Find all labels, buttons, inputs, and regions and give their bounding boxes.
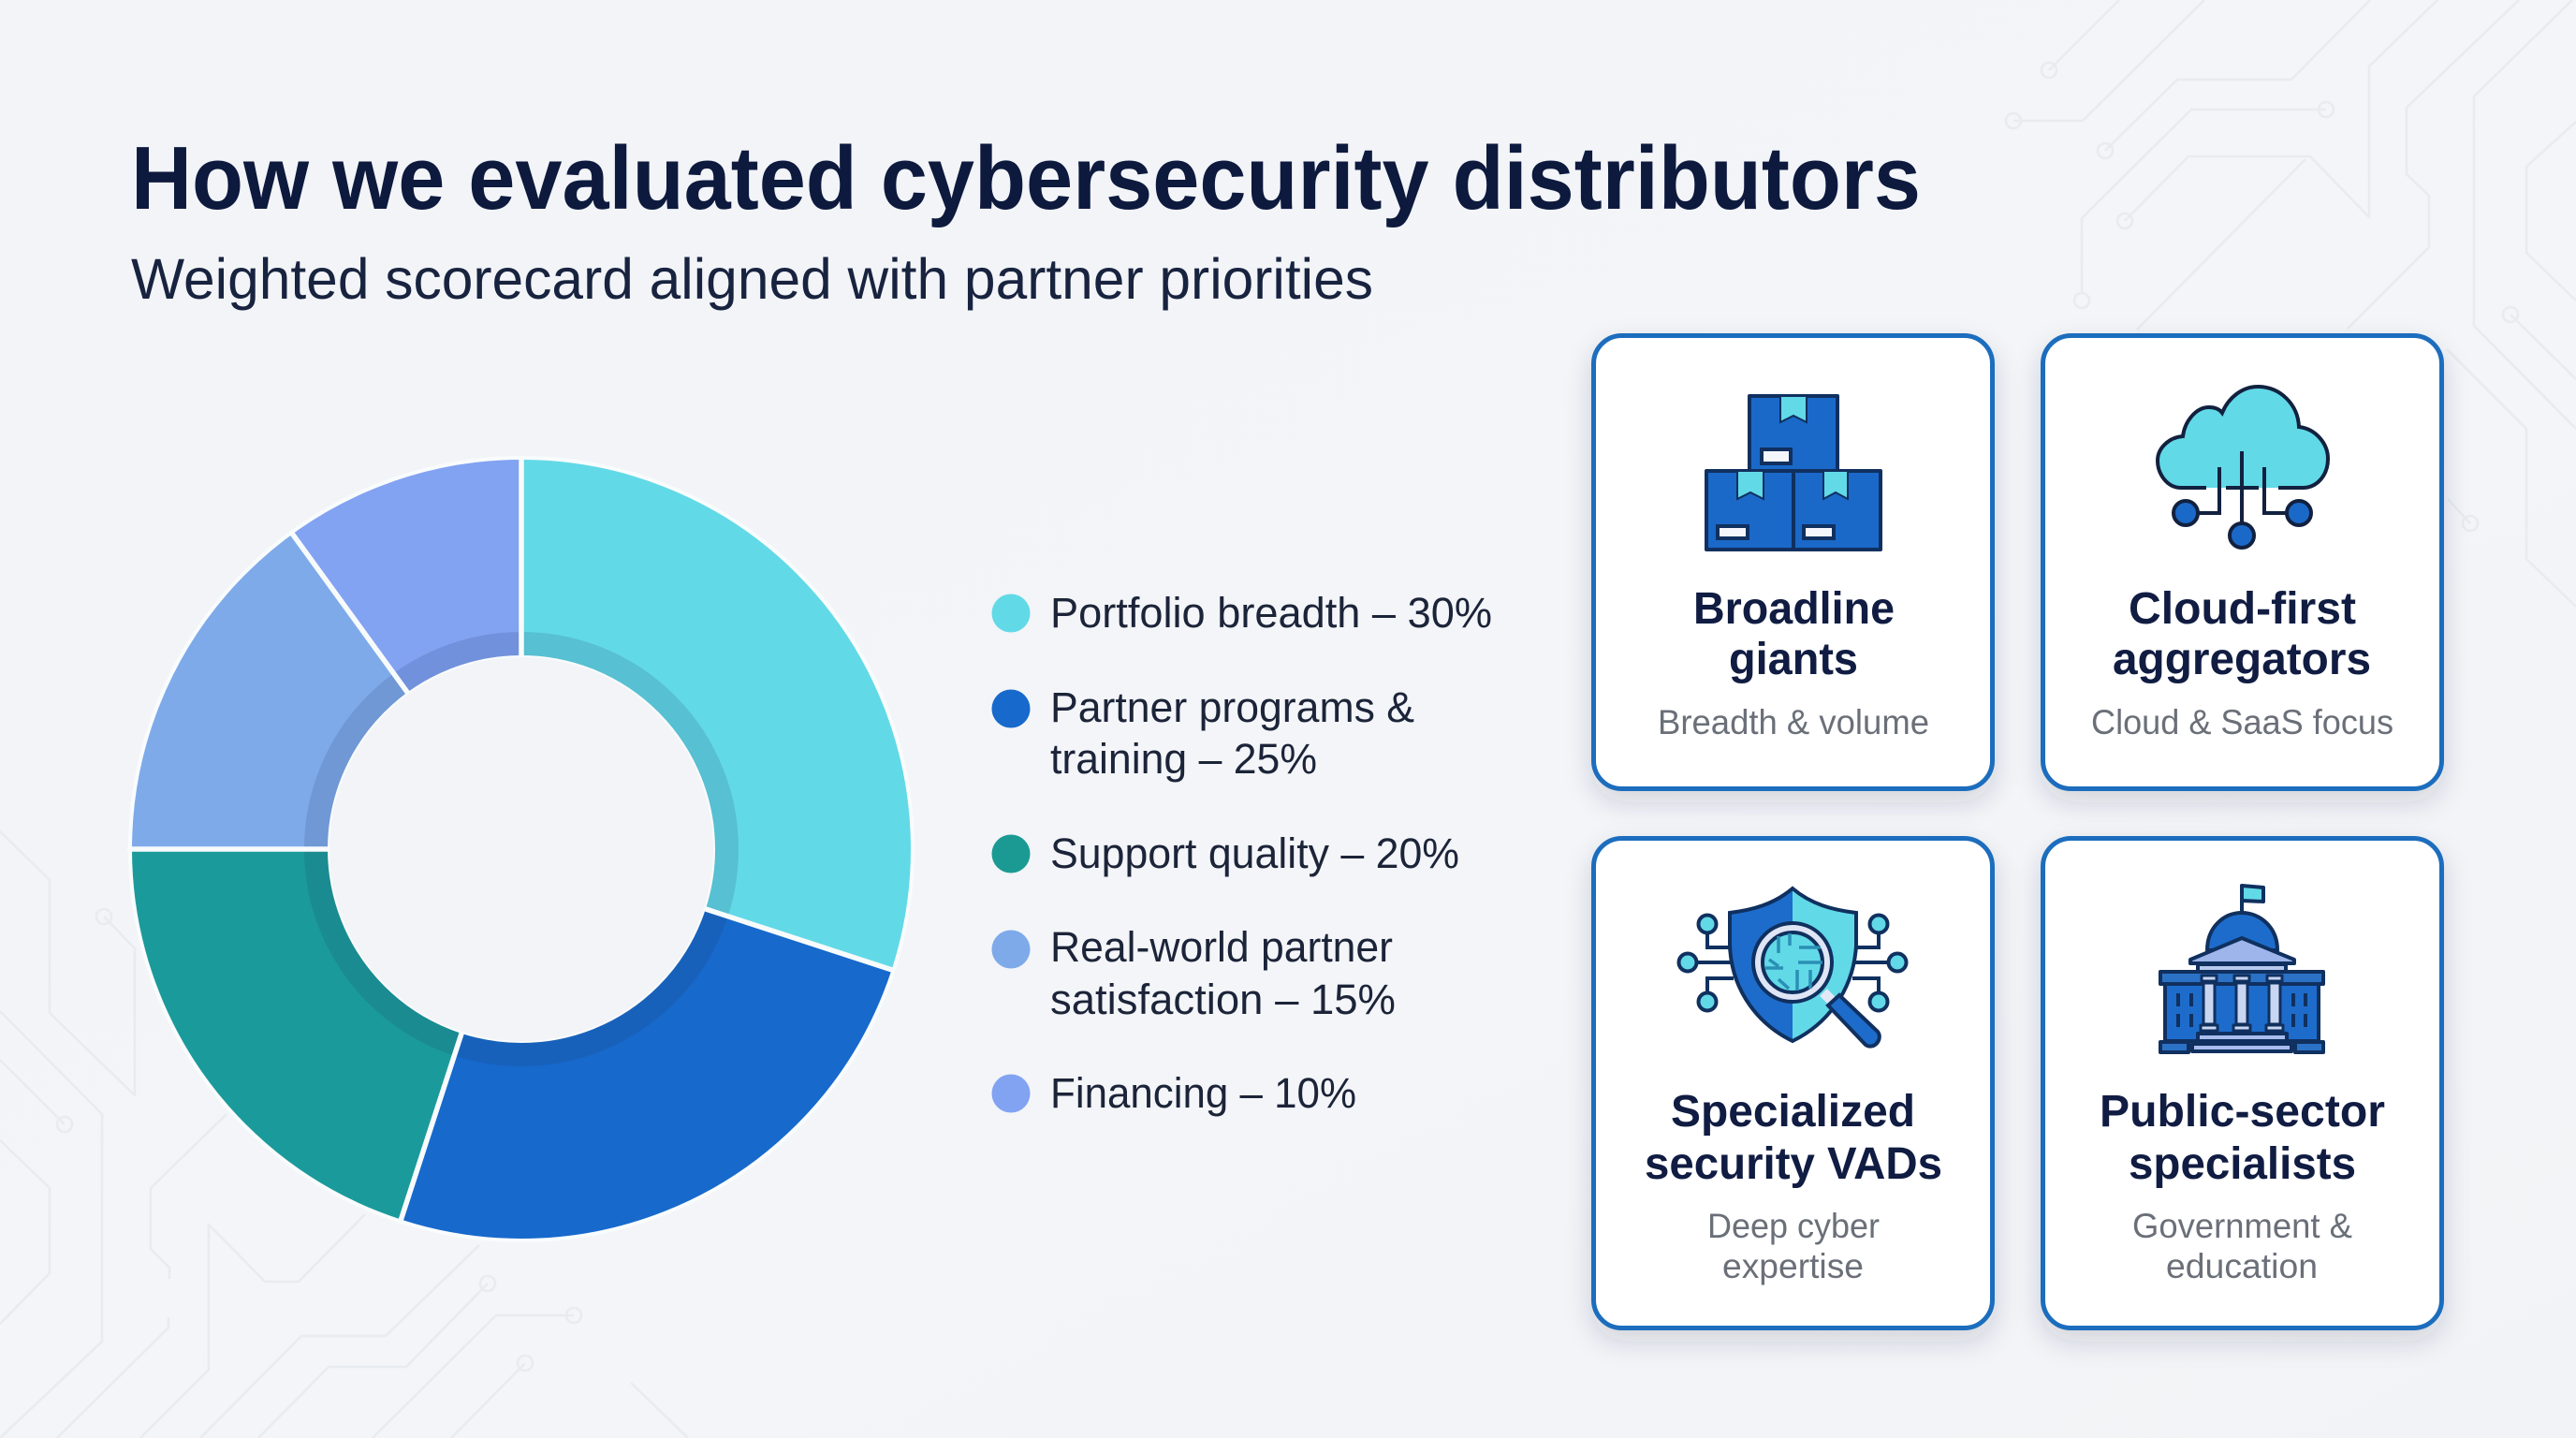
legend item: Partner programs and training — [992, 683, 1414, 783]
card title: Broadline — [1693, 584, 1895, 634]
card title — [2113, 584, 2371, 684]
legend item: Partner programs and training: Partner programs & — [1050, 683, 1414, 731]
card subtitle: Breadth & volume — [1658, 703, 1929, 741]
panel: Cloud-first aggregators — [2042, 335, 2441, 788]
card subtitle: Government & — [2132, 1207, 2352, 1245]
card title — [1693, 584, 1895, 684]
subtitle: Weighted scorecard aligned with partner priorities — [131, 247, 1373, 311]
card subtitle: Cloud & SaaS focus — [2091, 703, 2393, 741]
card title: security VADs — [1645, 1139, 1942, 1189]
panel: Public-sector specialists — [2042, 839, 2441, 1328]
legend item: Support quality: Support quality – 20% — [1050, 829, 1459, 877]
panel: Specialized security VADs — [1593, 839, 1992, 1328]
segment: Partner programs and training 25% — [401, 909, 893, 1240]
segment: Portfolio breadth 30% — [521, 459, 912, 970]
segment: Financing 10% — [292, 459, 521, 693]
legend item: Real-world partner satisfaction: satisfaction – 15% — [1050, 976, 1396, 1023]
legend item: Financing: Financing – 10% — [1050, 1069, 1356, 1117]
panel: Broadline giants — [1593, 335, 1992, 788]
segment: Real-world partner satisfaction 15% — [131, 534, 408, 849]
card subtitle — [1707, 1207, 1880, 1285]
icon: cloud with network nodes — [2158, 387, 2328, 548]
icon: government building — [2160, 885, 2323, 1052]
card title: specialists — [2129, 1139, 2356, 1189]
donut chart: scorecard weights — [127, 456, 913, 1240]
legend item: Real-world partner satisfaction: Real-world partner — [1050, 923, 1393, 971]
card title: Public-sector — [2100, 1087, 2385, 1137]
legend item: Portfolio breadth: Portfolio breadth – 30% — [1050, 589, 1492, 637]
card subtitle: expertise — [1722, 1247, 1864, 1285]
card subtitle — [2132, 1207, 2352, 1285]
icon: stacked boxes — [1706, 396, 1881, 550]
card title — [2100, 1087, 2385, 1189]
card title: aggregators — [2113, 635, 2371, 684]
segment: Support quality 20% — [131, 849, 461, 1221]
card title: Specialized — [1671, 1087, 1915, 1137]
card title — [1645, 1087, 1942, 1189]
legend item: Partner programs and training: training – 25% — [1050, 735, 1317, 783]
card title: giants — [1729, 635, 1858, 684]
icon: shield with magnifier — [1679, 888, 1906, 1047]
legend — [992, 589, 1492, 1117]
legend item: Real-world partner satisfaction — [992, 923, 1396, 1023]
card subtitle: Deep cyber — [1707, 1207, 1880, 1245]
card title: Cloud-first — [2129, 584, 2356, 634]
title: How we evaluated cybersecurity distributors — [131, 128, 1921, 228]
card subtitle: education — [2166, 1247, 2318, 1285]
